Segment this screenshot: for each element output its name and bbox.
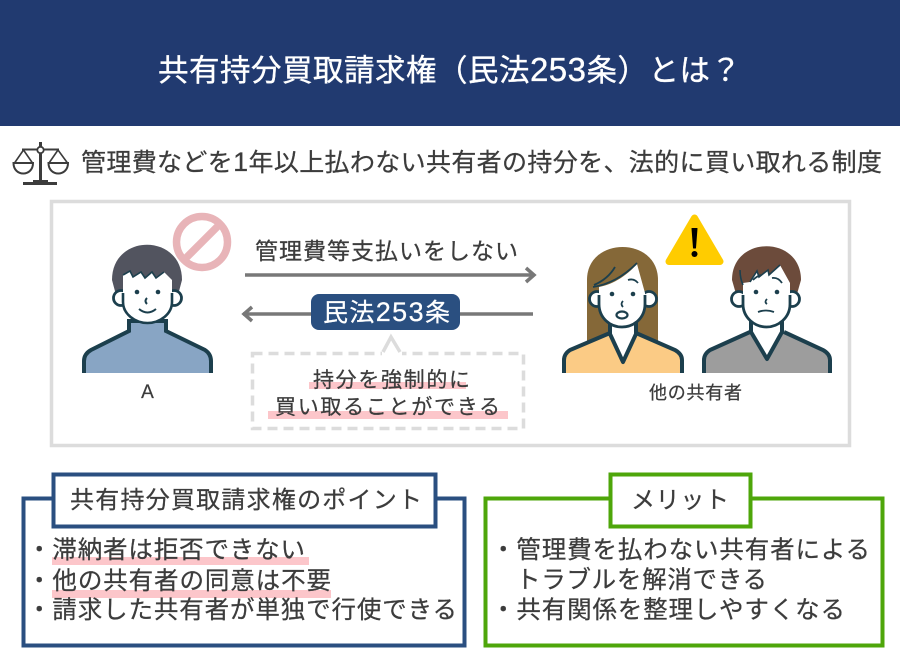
panel: merits [486,474,882,646]
arrow: right [245,268,534,282]
person: man [704,246,830,373]
person: woman [564,247,682,373]
merit 1: ・管理費を払わない共有者による [491,536,870,564]
title: 共有持分買取請求権（民法253条）とは？ [158,51,741,88]
arrow: left [243,307,533,321]
callout: dashed box [252,337,524,428]
title banner [0,0,900,126]
highlight [309,382,466,389]
callout text line 2: 買い取ることができる [275,396,500,419]
panel: points [24,474,464,646]
points heading: 共有持分買取請求権のポイント [70,487,422,514]
icon: prohibited sign [176,216,228,268]
label: A: A [141,382,154,403]
merit 2: ・共有関係を整理しやすくなる [491,596,845,624]
point 3: ・請求した共有者が単独で行使できる [27,596,457,624]
highlight [52,590,331,598]
icon: balance scale [14,142,68,184]
points heading [54,474,436,526]
highlight [52,557,309,565]
callout text line 1: 持分を強制的に [313,369,470,392]
point 1: ・滞納者は拒否できない [27,536,305,564]
person A [84,245,211,373]
merit 1 continued: トラブルを解消できる [516,566,767,594]
highlight [268,411,508,419]
label: other co-owners: 他の共有者 [649,383,742,403]
merits heading [610,474,750,526]
point 2: ・他の共有者の同意は不要 [27,567,331,595]
subtitle: 管理費などを1年以上払わない共有者の持分を、法的に買い取れる制度 [81,147,882,177]
badge: civil code: 民法253条 [323,297,450,327]
panel: diagram [52,202,850,446]
icon: warning [669,218,720,262]
arrow text: 管理費等支払いをしない [255,238,518,264]
merits heading: メリット [631,487,729,514]
